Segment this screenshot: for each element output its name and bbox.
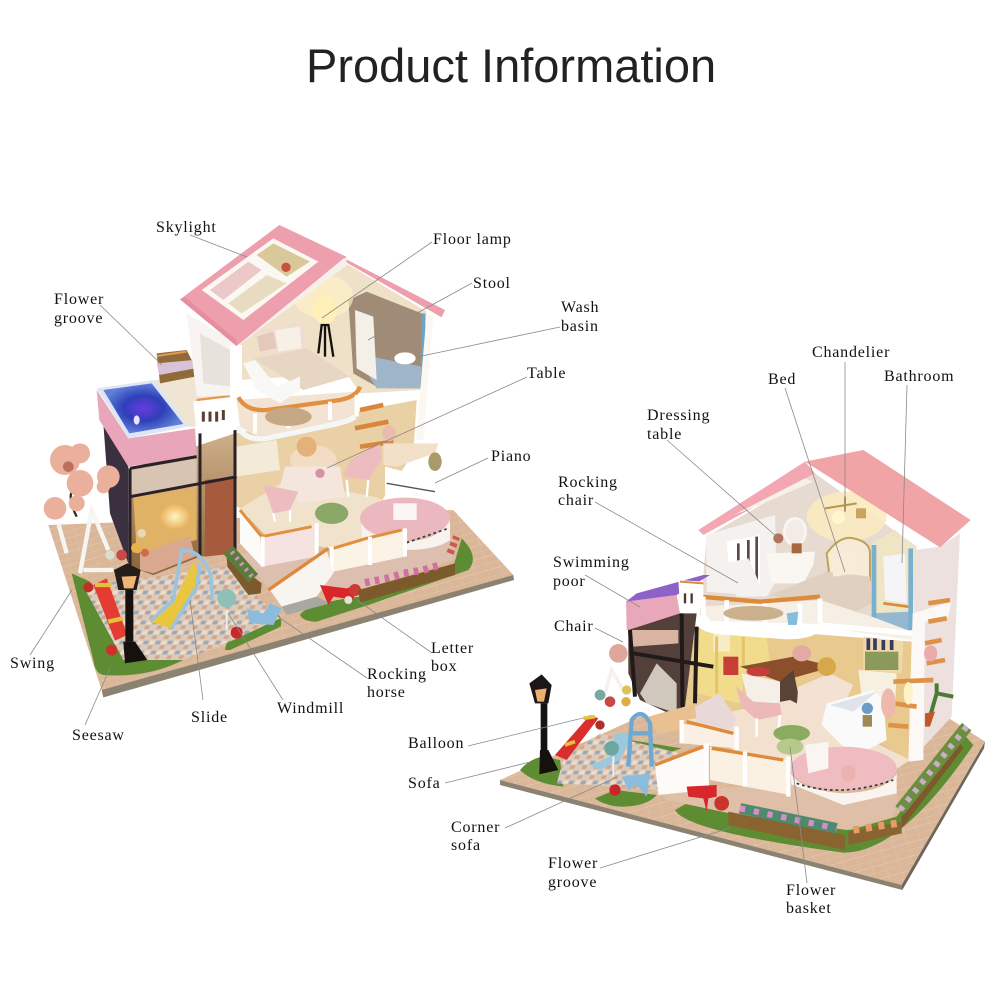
labels: back view: box xyxy=(431,658,457,675)
glass box under the pool xyxy=(103,423,237,575)
flower box front xyxy=(728,808,902,850)
floor and terrace xyxy=(687,700,910,777)
labels: front view: Chandelier xyxy=(812,344,890,361)
letter box xyxy=(687,785,729,812)
flower pot on floor xyxy=(315,503,348,524)
swing and tree xyxy=(603,644,631,700)
front railing xyxy=(240,510,405,607)
roof xyxy=(698,450,971,547)
grass xyxy=(72,538,473,676)
right wall xyxy=(910,533,960,762)
slide xyxy=(590,714,652,770)
ground floor interior xyxy=(682,625,912,760)
seesaw xyxy=(555,715,605,760)
chandelier xyxy=(825,497,866,524)
labels: back view: Floor lamp xyxy=(433,231,512,248)
back shelf and books xyxy=(858,637,903,707)
labels: front view: Swimming xyxy=(553,554,630,571)
balcony xyxy=(698,597,912,640)
seesaw xyxy=(83,578,127,656)
upper deck and railing xyxy=(155,375,237,433)
terrace floor xyxy=(240,480,447,548)
corner sofa toy xyxy=(622,773,650,797)
labels: front view xyxy=(408,344,954,917)
windmill xyxy=(217,589,243,639)
labels: back view: Table xyxy=(527,365,566,382)
balloons xyxy=(105,529,149,560)
labels: back view: Windmill xyxy=(277,700,344,717)
floor lamp xyxy=(293,275,353,357)
round stage xyxy=(790,742,897,805)
labels: front view: Bed xyxy=(768,371,796,388)
labels: back view: horse xyxy=(367,684,406,701)
front railings xyxy=(655,720,790,797)
rocking chair xyxy=(723,558,770,597)
base board xyxy=(500,717,985,890)
labels: back view: Piano xyxy=(491,448,531,465)
ground floor back wall xyxy=(235,400,417,520)
piano xyxy=(383,443,442,513)
cherry tree xyxy=(44,443,120,520)
labels: back view: Flower xyxy=(54,291,104,308)
labels: front view: Corner xyxy=(451,819,500,836)
sofa xyxy=(695,693,737,730)
flower box center xyxy=(227,550,262,595)
roof xyxy=(180,225,445,346)
dining table xyxy=(797,657,853,727)
piano xyxy=(822,688,896,757)
labels: back view: Skylight xyxy=(156,219,217,236)
labels: front view: basket xyxy=(786,900,832,917)
flower groove upper xyxy=(157,350,195,383)
flower basket xyxy=(773,725,810,755)
brick foundation xyxy=(240,537,453,590)
bathroom xyxy=(348,292,423,390)
labels: front view: Bathroom xyxy=(884,368,954,385)
balcony xyxy=(237,387,360,439)
skylight xyxy=(202,238,318,320)
glass box xyxy=(626,575,713,733)
checker paving xyxy=(557,733,680,790)
flower box side xyxy=(900,727,967,828)
upper railing small xyxy=(678,580,703,607)
labels: front view: Chair xyxy=(554,618,594,635)
labels: back view: Seesaw xyxy=(72,727,125,744)
shelves xyxy=(697,630,770,703)
labels: back view: basin xyxy=(561,318,599,335)
round stage xyxy=(360,498,450,550)
warm ceiling light xyxy=(807,492,887,542)
bed xyxy=(770,538,872,613)
upper room interior xyxy=(240,263,427,393)
red flower xyxy=(609,784,621,796)
bed xyxy=(253,322,350,390)
labels: back view: Wash xyxy=(561,299,599,316)
kitchen counter xyxy=(740,645,833,707)
labels: front view: Rocking xyxy=(558,474,618,491)
labels: back view: Slide xyxy=(191,709,228,726)
title: Product Information xyxy=(306,39,716,92)
labels: front view: chair xyxy=(558,492,594,509)
labels: front view: poor xyxy=(553,573,586,590)
stairs base xyxy=(282,597,330,615)
chairs xyxy=(263,443,382,522)
labels: front view: groove xyxy=(548,874,597,891)
labels: back view: Stool xyxy=(473,275,511,292)
labels: front view: sofa xyxy=(451,837,481,854)
labels: back view xyxy=(10,219,599,744)
labels: front view: Dressing xyxy=(647,407,710,424)
windmill xyxy=(610,757,616,777)
white pillar and stairs xyxy=(888,600,952,762)
brick foundation xyxy=(658,785,898,830)
upper left wall with window xyxy=(187,313,242,400)
rocking chair xyxy=(243,360,300,403)
rocking horse xyxy=(247,603,282,625)
illustration: dollhouse front view xyxy=(500,450,985,890)
base board xyxy=(48,510,514,697)
bathroom xyxy=(872,530,917,632)
balloons xyxy=(595,690,631,707)
checker paving xyxy=(83,567,280,660)
stairs xyxy=(355,405,396,447)
labels: front view: Sofa xyxy=(408,775,441,792)
labels: back view: Letter xyxy=(431,640,474,657)
labels: front view: Balloon xyxy=(408,735,464,752)
labels: back view: Swing xyxy=(10,655,55,672)
street lamp xyxy=(529,674,558,774)
kitchen cabinets xyxy=(237,440,280,477)
white post xyxy=(416,313,433,440)
slide xyxy=(150,550,212,628)
labels: front view: Flower xyxy=(548,855,598,872)
swing xyxy=(58,510,113,573)
left wall xyxy=(706,515,777,597)
labels: back view: Rocking xyxy=(367,666,427,683)
dining table xyxy=(280,437,345,503)
grass xyxy=(520,730,973,853)
letter box xyxy=(320,584,361,605)
illustration: dollhouse back view xyxy=(44,225,514,697)
flower box right xyxy=(358,537,457,603)
upper room interior xyxy=(700,473,917,632)
dressing table xyxy=(767,518,815,583)
labels: front view: Flower xyxy=(786,882,836,899)
labels: back view: groove xyxy=(54,310,103,327)
pink chair xyxy=(736,687,782,737)
street lamp xyxy=(114,563,147,663)
plant xyxy=(925,683,953,727)
leader lines xyxy=(30,235,907,883)
swimming pool xyxy=(97,380,197,467)
labels: front view: table xyxy=(647,426,682,443)
